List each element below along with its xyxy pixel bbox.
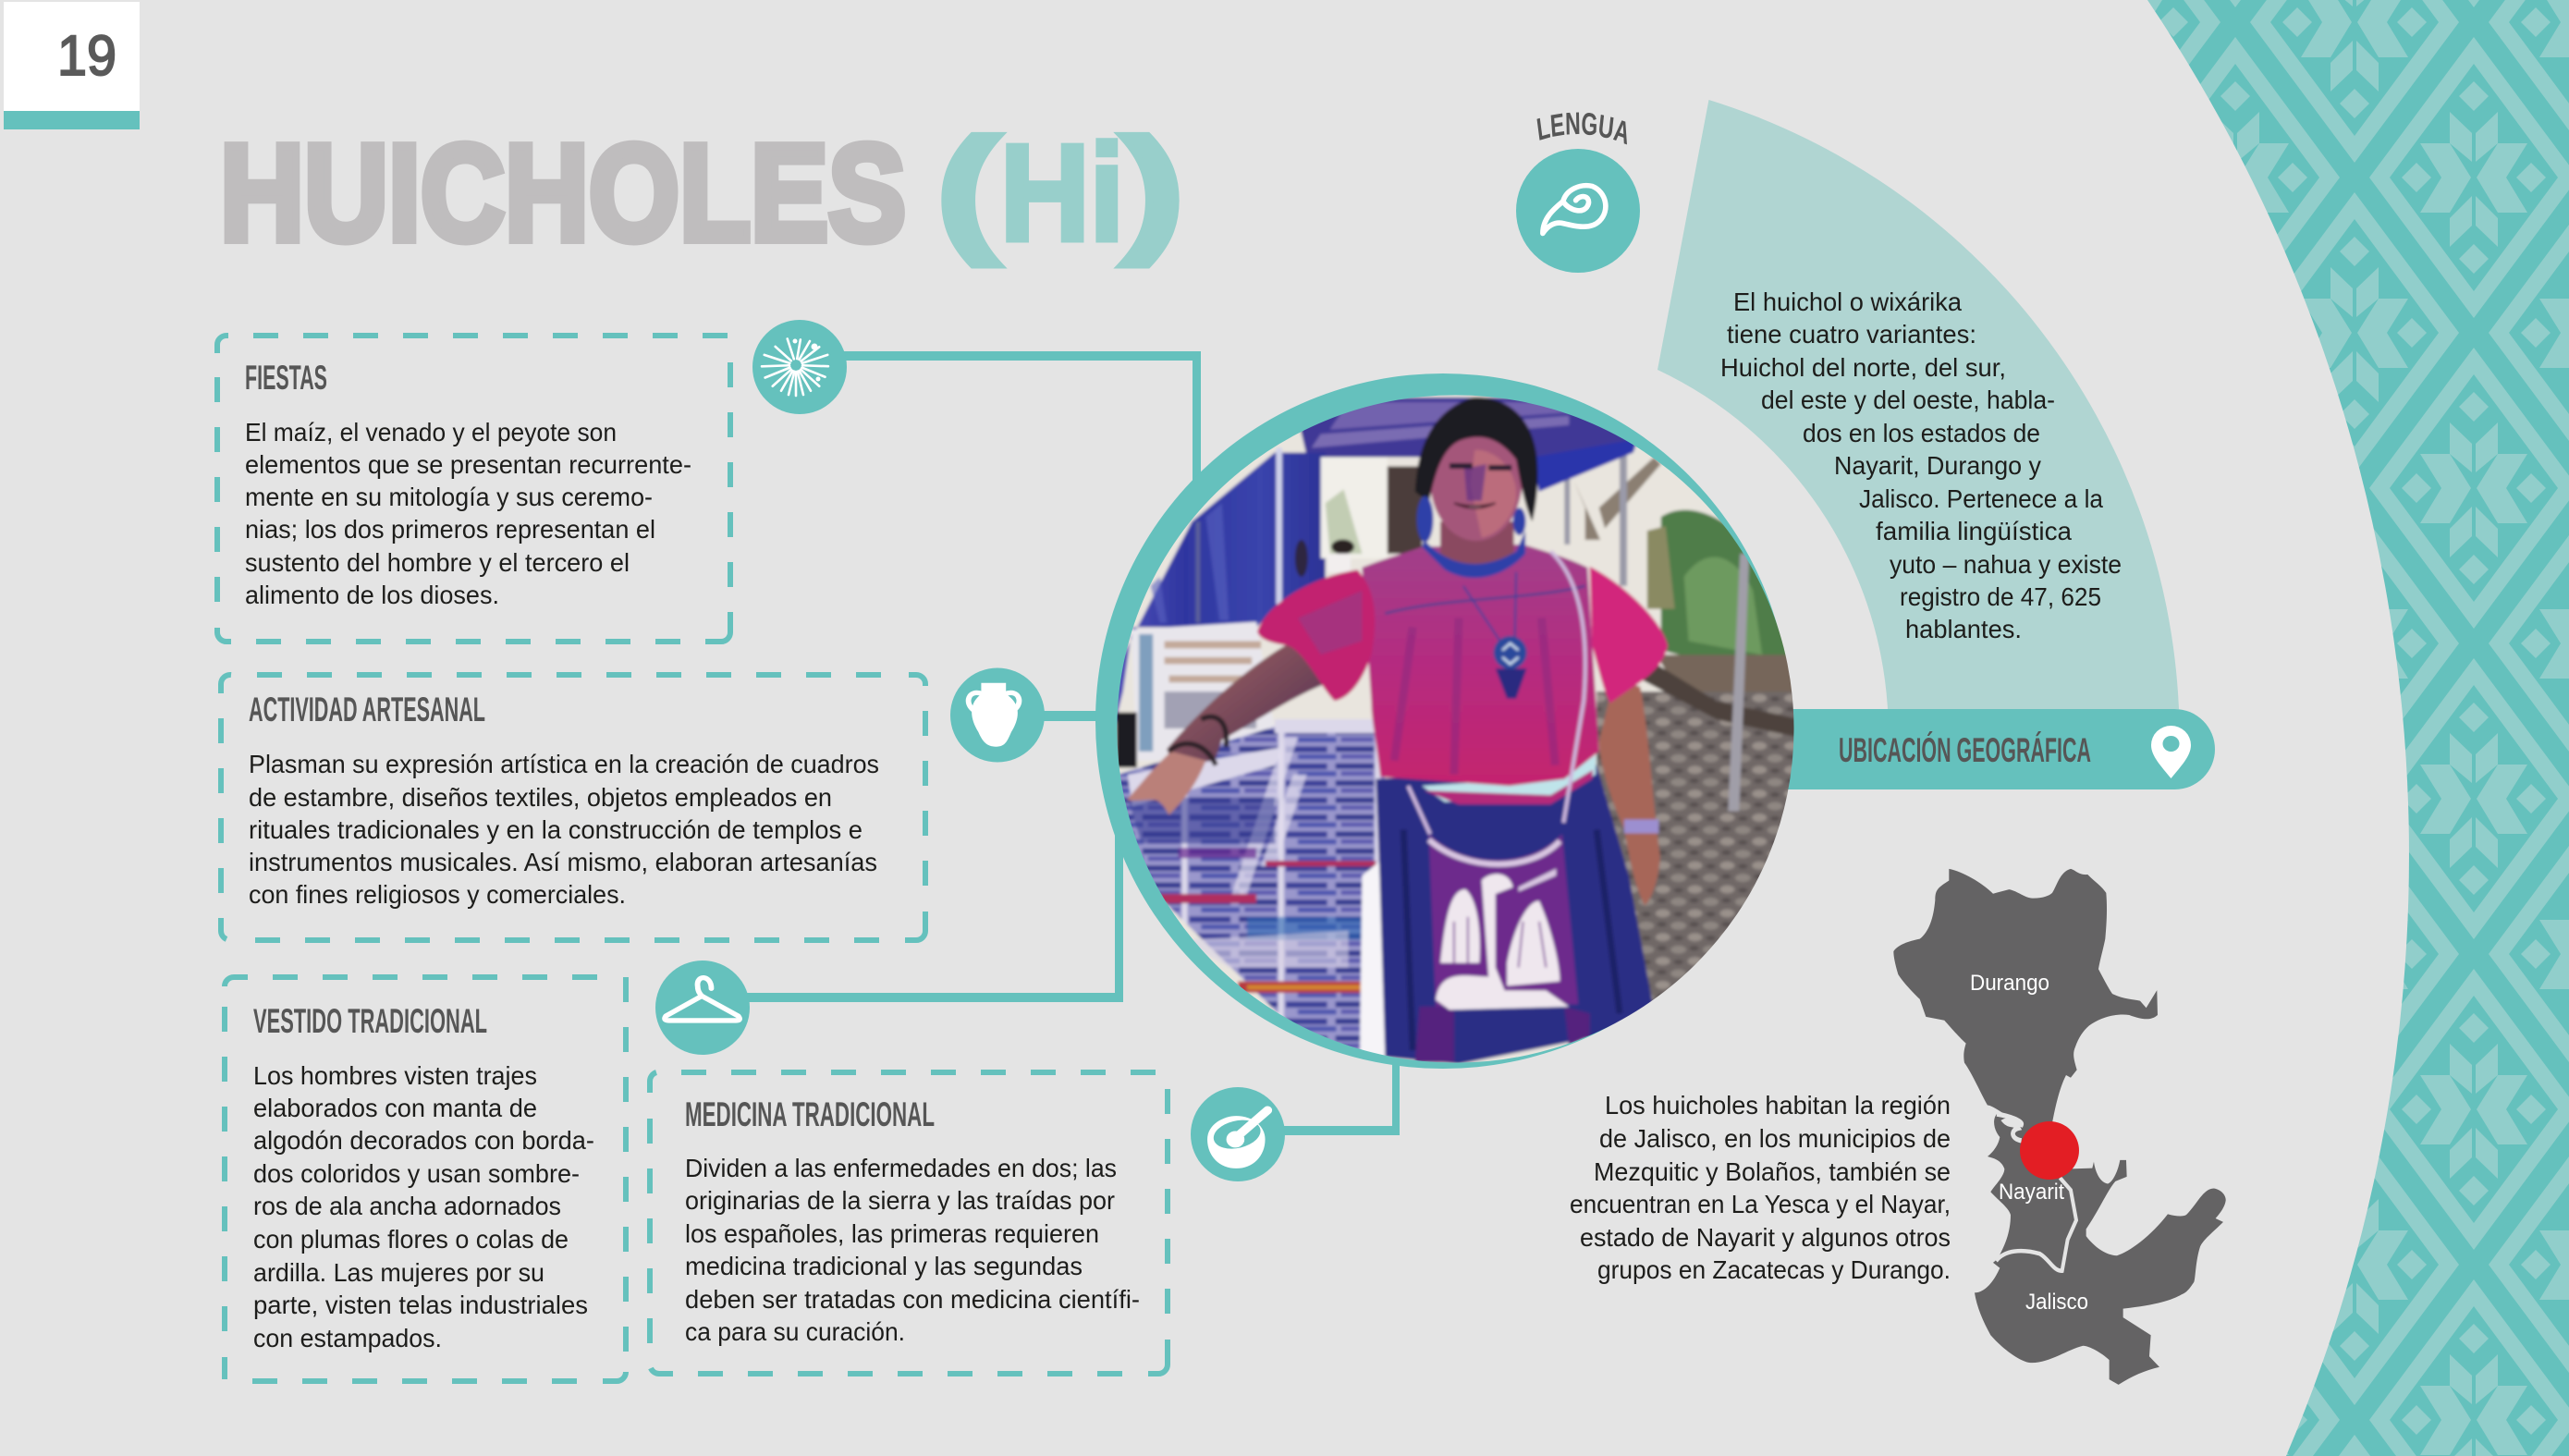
text: vestido tradicional: ardilla. Las mujeres por su [253,1258,544,1287]
map marker: red dot [2020,1121,2079,1180]
text: lengua description [1720,288,2122,643]
text: lengua description: familia lingüística [1876,517,2072,545]
text: actividad artesanal: rituales tradicionales y en la construcción de templos e [249,815,862,844]
title: HUICHOLES [220,116,906,270]
heading: actividad artesanal: ACTIVIDAD ARTESANAL [249,691,485,728]
panel: actividad artesanal [221,675,925,940]
text: lengua description: del este y del oeste, habla- [1761,385,2055,414]
left arm [1167,643,1323,765]
map label: Jalisco: Jalisco [2025,1290,2088,1315]
text: vestido tradicional: con estampados. [253,1324,442,1352]
eagle [1440,889,1480,963]
text: location description: encuentran en La Yesca y el Nayar, [1570,1190,1951,1218]
map label: Nayarit: Nayarit [1999,1180,2064,1205]
connector lines [703,351,1400,1135]
text: lengua description: Huichol del norte, del sur, [1720,353,2006,382]
bead table [1119,724,1385,1064]
left curtains [1109,453,1326,747]
text: vestido tradicional: elaborados con manta de [253,1094,537,1122]
text: location description [1570,1091,1951,1284]
text: lengua description: hablantes. [1905,615,2022,643]
text: fiestas [245,418,691,609]
text: fiestas: mente en su mitología y sus ceremo- [245,483,653,511]
text: vestido tradicional: algodón decorados con borda- [253,1126,594,1155]
right arm [1599,685,1660,905]
doorway [1321,458,1388,558]
text: medicina tradicional: medicina tradicional y las segundas [685,1252,1083,1280]
central photo ring [1095,373,1791,1069]
text: fiestas: sustento del hombre y el tercero el [245,548,630,577]
text: lengua description: registro de 47, 625 [1900,582,2101,611]
text: vestido tradicional: parte, visten telas industriales [253,1291,588,1319]
text: vestido tradicional [253,1061,594,1352]
text: medicina tradicional: originarias de la sierra y las traídas por [685,1186,1115,1215]
icon: fireworks [752,320,847,414]
photo: huichol woman at artisan stall [1117,395,1793,1063]
text: location description: Los huicholes habitan la región [1605,1091,1951,1120]
text: lengua description: Jalisco. Pertenece a la [1859,484,2103,513]
map label: Durango: Durango [1970,971,2049,996]
mexico label [1519,869,1556,892]
label: lengua: LENGUA [1536,113,1627,144]
text: location description: de Jalisco, en los municipios de [1599,1124,1951,1153]
page number tab [4,2,140,129]
skirt [1376,765,1653,1064]
heading: vestido tradicional: VESTIDO TRADICIONAL [253,1002,487,1040]
label: lengua [1536,113,1627,144]
neck and collar [1438,520,1516,566]
map: Durango, Nayarit, Jalisco [1893,869,2226,1385]
panel: vestido tradicional [225,977,626,1381]
text: lengua description: El huichol o wixárika [1733,288,1962,316]
display board [1132,622,1275,761]
canopy [1300,396,1631,459]
icon: hanger [655,960,750,1055]
icon: lengua speech swirl [1516,149,1640,273]
page number: 19 [57,24,116,87]
text: lengua description: tiene cuatro variantes: [1727,320,1976,349]
right side scene [1658,508,1786,657]
text: medicina tradicional: ca para su curación. [685,1317,905,1346]
text: fiestas: nias; los dos primeros representan el [245,515,655,544]
text: actividad artesanal [249,750,879,909]
text: vestido tradicional: Los hombres visten trajes [253,1061,537,1090]
text: fiestas: El maíz, el venado y el peyote son [245,418,617,447]
text: actividad artesanal: de estambre, diseños textiles, objetos empleados en [249,783,832,812]
text: location description: grupos en Zacatecas y Durango. [1597,1255,1951,1284]
language fan panel [1658,100,2179,709]
heading: fiestas: FIESTAS [245,359,327,397]
ubicacion geografica bar [1710,709,2215,789]
title: Hi [1000,116,1124,270]
text: vestido tradicional: dos coloridos y usan sombre- [253,1159,580,1188]
text: medicina tradicional: Dividen a las enfermedades en dos; las [685,1154,1117,1182]
title: ) [1120,110,1185,267]
text: lengua description: yuto – nahua y existe [1890,550,2122,579]
icon: vase [950,667,1045,762]
text: fiestas: alimento de los dioses. [245,581,499,609]
text: actividad artesanal: instrumentos musicales. Así mismo, elaboran artesanías [249,848,877,876]
panel: fiestas [217,336,730,642]
text: location description: Mezquitic y Bolaños, también se [1594,1157,1951,1186]
bag strap [1408,551,1585,834]
face [1430,420,1523,541]
text: actividad artesanal: Plasman su expresión artística en la creación de cuadros [249,750,879,778]
text: location description: estado de Nayarit y algunos otros [1580,1223,1951,1252]
text: vestido tradicional: ros de ala ancha adornados [253,1192,561,1220]
text: actividad artesanal: con fines religiosos y comerciales. [249,880,626,909]
waist band [1422,755,1596,802]
panel: medicina tradicional [650,1072,1168,1374]
text: vestido tradicional: con plumas flores o colas de [253,1225,569,1254]
heading: medicina tradicional: MEDICINA TRADICIONAL [685,1095,935,1133]
text: medicina tradicional [685,1154,1140,1346]
text: fiestas: elementos que se presentan recurrente- [245,450,691,479]
icon: location pin [2151,726,2191,778]
heading: ubicacion geografica: UBICACIÓN GEOGRÁFICA [1839,730,2091,769]
hair [1415,398,1537,521]
icon: mortar and pestle [1191,1087,1285,1181]
necklace medallion [1463,572,1516,641]
text: lengua description: Nayarit, Durango y [1834,451,2041,480]
title: ( [936,110,1001,267]
text: lengua description: dos en los estados de [1803,419,2040,447]
text: medicina tradicional: los españoles, las primeras requieren [685,1219,1099,1248]
blouse [1362,544,1599,786]
bag [1429,834,1578,1007]
text: medicina tradicional: deben ser tratadas con medicina científi- [685,1285,1140,1314]
